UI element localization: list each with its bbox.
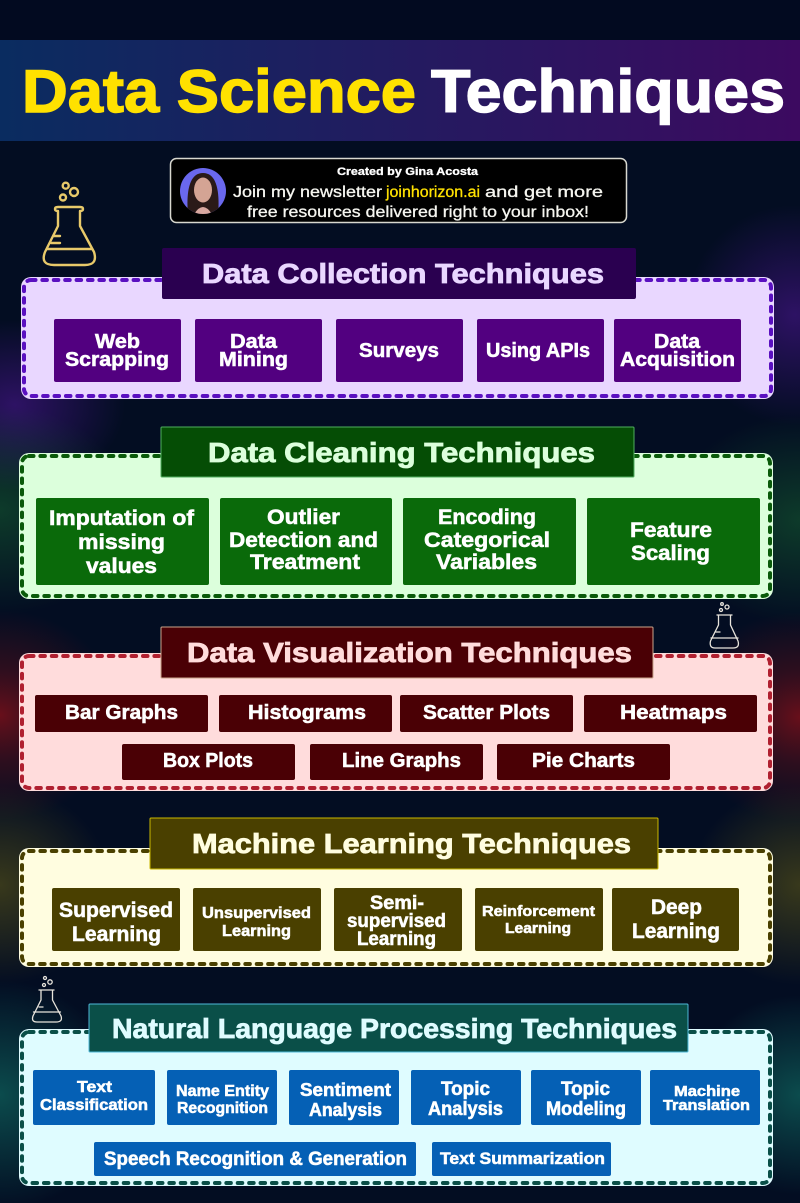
title banner: Techniques (431, 58, 785, 125)
item: topic modeling: Modeling (546, 1099, 626, 1120)
item: speech recognition and generation: Speech Recognition & Generation (104, 1149, 407, 1170)
item: outlier detection: Outlier (267, 506, 340, 529)
item: scatter plots: Scatter Plots (423, 702, 550, 724)
item: data acquisition (614, 319, 741, 382)
item: using apis (477, 319, 604, 382)
heading: data collection: Data Collection Techniques (202, 258, 604, 289)
item: semi-supervised learning: Learning (357, 929, 436, 950)
item: using apis: Using APIs (486, 340, 590, 362)
item: semi-supervised learning: Semi- (370, 893, 424, 914)
heading: data visualization (161, 627, 653, 678)
item: box plots: Box Plots (163, 750, 253, 772)
item: data mining: Data (230, 331, 278, 353)
avatar portrait (180, 168, 226, 216)
item: outlier detection (220, 498, 392, 585)
panel: machine learning (19, 818, 773, 967)
item: topic analysis: Analysis (428, 1099, 503, 1120)
heading: data visualization: Data Visualization Techniques (187, 637, 632, 668)
item: topic modeling: Topic (561, 1079, 610, 1100)
callout: newsletter: and get more (485, 184, 603, 201)
item: pie charts (497, 744, 670, 780)
item: machine translation: Translation (663, 1097, 750, 1114)
item: heatmaps: Heatmaps (620, 702, 727, 724)
heading: data cleaning (161, 427, 634, 477)
item: heatmaps (584, 695, 757, 732)
item: box plots (122, 744, 295, 780)
item: data mining: Mining (219, 349, 288, 371)
item: pie charts: Pie Charts (532, 750, 635, 772)
item: imputation (36, 498, 209, 585)
item: feature scaling: Feature (630, 519, 712, 542)
heading: natural language processing: Natural Language Processing Techniques (112, 1013, 677, 1044)
item: supervised learning: Supervised (59, 899, 173, 922)
item: text classification (33, 1070, 155, 1125)
item: feature scaling: Scaling (631, 542, 710, 565)
panel: data visualization (19, 627, 773, 791)
callout: newsletter: joinhorizon.ai (385, 184, 480, 201)
item: deep learning: Learning (632, 920, 720, 943)
item: name entity recognition: Name Entity (176, 1083, 269, 1100)
item: encoding: Encoding (438, 506, 536, 529)
item: web scrapping (54, 319, 181, 382)
item: sentiment analysis (289, 1070, 399, 1125)
item: reinforcement learning (475, 888, 603, 951)
item: data acquisition: Data (654, 331, 701, 353)
item: deep learning (612, 888, 739, 951)
item: speech recognition and generation (94, 1142, 416, 1176)
item: data acquisition: Acquisition (620, 349, 735, 371)
item: unsupervised learning: Learning (222, 923, 291, 940)
callout: newsletter: Created by Gina Acosta (337, 166, 479, 178)
item: imputation: Imputation of (49, 507, 195, 530)
item: supervised learning (52, 888, 180, 951)
item: outlier detection: Treatment (250, 551, 360, 574)
item: reinforcement learning: Learning (505, 920, 571, 937)
item: text summarization: Text Summarization (440, 1149, 605, 1168)
item: name entity recognition: Recognition (177, 1100, 268, 1117)
item: feature scaling (587, 498, 760, 585)
item: web scrapping: Web (95, 331, 140, 353)
item: semi-supervised learning (334, 888, 462, 951)
item: histograms (219, 695, 392, 732)
item: bar graphs (35, 695, 208, 732)
title banner (0, 40, 800, 141)
panel: data cleaning (19, 427, 773, 599)
item: surveys: Surveys (359, 340, 439, 362)
callout: newsletter (170, 158, 626, 222)
icon: small flask left (32, 976, 61, 1022)
callout: newsletter: free resources delivered right to your inbox! (247, 204, 589, 221)
callout: newsletter: Join my newsletter (233, 184, 383, 201)
heading: data collection (162, 248, 636, 299)
icon: large flask (44, 183, 95, 265)
item: data mining (195, 319, 322, 382)
item: surveys (336, 319, 463, 382)
heading: machine learning: Machine Learning Techniques (192, 828, 631, 859)
item: topic analysis: Topic (441, 1079, 490, 1100)
item: line graphs (310, 744, 483, 780)
item: encoding: Variables (436, 551, 537, 574)
item: sentiment analysis: Sentiment (300, 1080, 391, 1100)
item: text classification: Classification (40, 1097, 148, 1114)
item: text classification: Text (77, 1079, 113, 1096)
panel: natural language processing (19, 1004, 773, 1186)
heading: machine learning (150, 818, 658, 869)
item: supervised learning: Learning (72, 923, 161, 946)
title banner: Data Science (22, 58, 416, 125)
item: sentiment analysis: Analysis (309, 1100, 382, 1120)
item: name entity recognition (167, 1070, 277, 1125)
item: histograms: Histograms (248, 702, 366, 724)
item: text summarization (432, 1142, 611, 1176)
heading: natural language processing (89, 1004, 688, 1052)
item: outlier detection: Detection and (229, 529, 378, 552)
item: web scrapping: Scrapping (65, 349, 169, 371)
item: semi-supervised learning: supervised (347, 911, 446, 932)
item: topic analysis (411, 1070, 521, 1125)
item: encoding (403, 498, 576, 585)
item: unsupervised learning: Unsupervised (202, 905, 311, 922)
panel: data collection (21, 248, 774, 399)
item: deep learning: Deep (651, 896, 702, 919)
item: topic modeling (531, 1070, 641, 1125)
heading: data cleaning: Data Cleaning Techniques (208, 437, 595, 468)
icon: small flask right (710, 603, 738, 648)
item: imputation: values (86, 555, 157, 578)
item: machine translation: Machine (674, 1083, 740, 1100)
item: encoding: Categorical (424, 529, 550, 552)
item: machine translation (650, 1070, 760, 1125)
item: reinforcement learning: Reinforcement (482, 903, 595, 920)
item: unsupervised learning (193, 888, 321, 951)
item: bar graphs: Bar Graphs (65, 702, 178, 724)
item: line graphs: Line Graphs (342, 750, 461, 772)
item: imputation: missing (78, 531, 165, 554)
item: scatter plots (400, 695, 573, 732)
